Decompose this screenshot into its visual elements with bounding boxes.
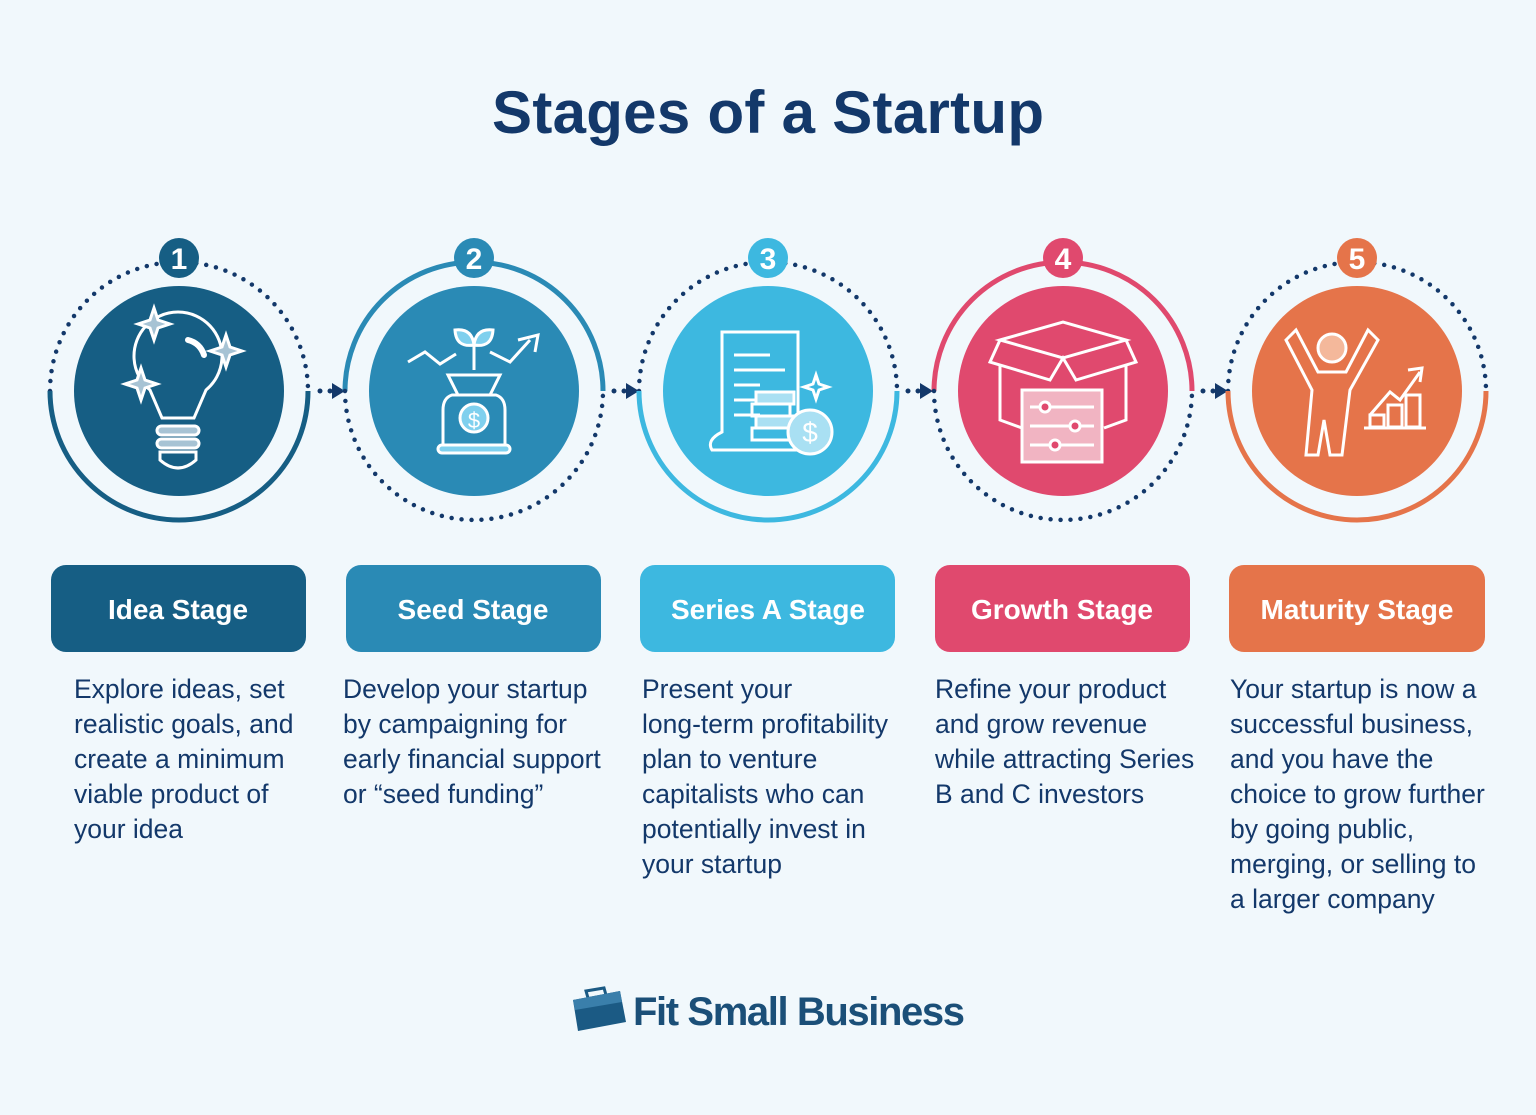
box: Seed Stage: Seed Stage [398,594,548,625]
text: series A: plan to venture [642,744,817,774]
arrow 2-3 [612,383,639,399]
box: Idea Stage [51,565,306,652]
text: seed: or “seed funding” [343,779,543,809]
text: seed: by campaigning for [343,709,567,739]
stage 3 ring [639,238,897,520]
logo: Fit Small Business [633,990,965,1034]
box: Growth Stage [935,565,1190,652]
stage 4 ring [934,238,1192,520]
box: Idea Stage: Idea Stage [108,594,248,625]
arrow 1-2 [318,383,345,399]
icon: celebrating person with chart [1286,330,1426,455]
text: idea: realistic goals, and [74,709,293,739]
box: Growth Stage: Growth Stage [971,594,1153,625]
box: Series A Stage [640,565,895,652]
box: Seed Stage [346,565,601,652]
text: maturity: successful business, [1230,709,1473,739]
stage 1 ring [50,238,308,520]
text: maturity: by going public, [1230,814,1414,844]
text: maturity: Your startup is now a [1230,674,1477,704]
text: maturity: merging, or selling to [1230,849,1476,879]
title: Stages of a Startup [492,79,1044,146]
icon: money bag plant [408,330,538,453]
icon: money bag plant: $ [468,408,480,433]
text: growth: B and C investors [935,779,1144,809]
icon: lightbulb [125,308,242,468]
text: idea: create a minimum [74,744,285,774]
arrow 3-4 [906,383,933,399]
text: idea: Explore ideas, set [74,674,285,704]
icon: box with sliders [990,322,1136,462]
text: growth: Refine your product [935,674,1167,704]
text: series A: capitalists who can [642,779,864,809]
label boxes [51,565,1485,652]
stage 1 ring: 1 [171,243,187,276]
text: seed: Develop your startup [343,674,588,704]
text: idea: your idea [74,814,183,844]
text: maturity: a larger company [1230,884,1435,914]
icon: document coins [710,332,832,454]
text: idea: viable product of [74,779,269,809]
text: series A: potentially invest in [642,814,866,844]
stage 2 ring: 2 [466,243,482,276]
stage 5 ring [1228,238,1486,520]
text: series A: your startup [642,849,782,879]
text: series A: Present your [642,674,792,704]
arrow 4-5 [1200,383,1228,399]
stage 3 ring: 3 [760,243,776,276]
text: seed: early financial support [343,744,601,774]
text: growth: while attracting Series [934,744,1194,774]
box: Series A Stage: Series A Stage [671,594,865,625]
text: maturity: and you have the [1230,744,1433,774]
icon: document coins: $ [802,417,818,448]
stage 2 ring [345,238,603,520]
box: Maturity Stage [1229,565,1485,652]
stage 4 ring: 4 [1055,243,1072,276]
text: maturity: choice to grow further [1230,779,1485,809]
text: growth: and grow revenue [935,709,1147,739]
text: series A: long-term profitability [642,709,889,739]
box: Maturity Stage: Maturity Stage [1261,594,1453,625]
icon: briefcase [573,988,626,1031]
stage 5 ring: 5 [1349,243,1365,276]
descriptions [74,674,1485,914]
